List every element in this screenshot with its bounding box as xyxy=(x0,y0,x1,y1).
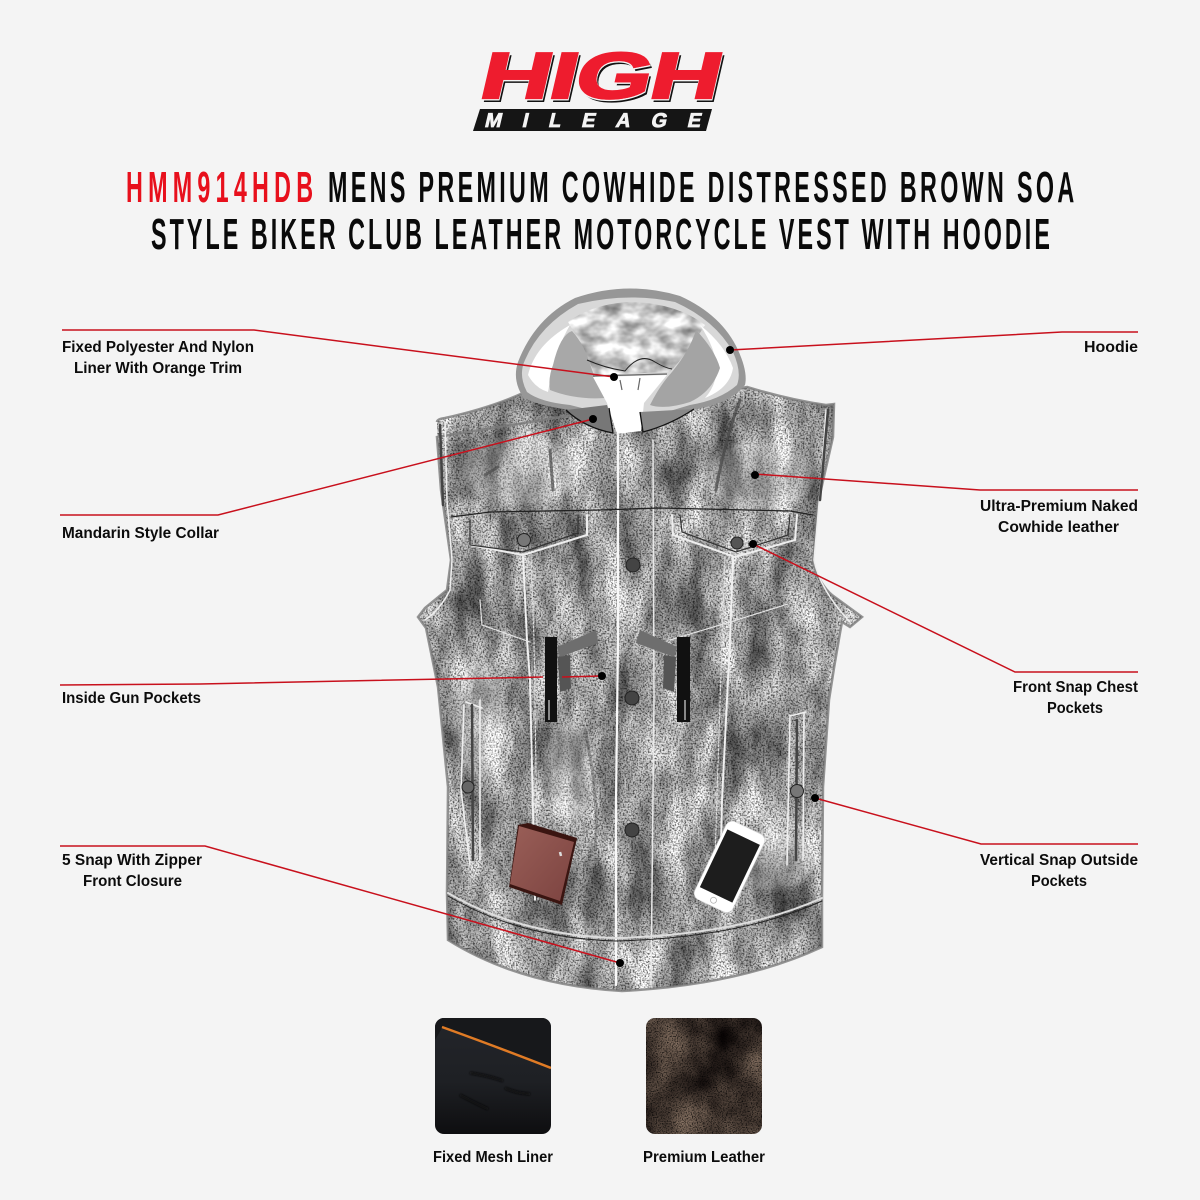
callout: Hoodie: Hoodie xyxy=(1084,339,1138,356)
callout: 5 Snap With Zipper Front Closure xyxy=(60,846,624,967)
logo: High Mileage: HIGH xyxy=(474,39,731,112)
callout: Front Snap Chest Pockets: Front Snap Chest xyxy=(1013,679,1138,696)
callout: 5 Snap With Zipper Front Closure: 5 Snap With Zipper xyxy=(62,852,202,869)
chest pockets xyxy=(470,515,587,555)
logo: High Mileage: HIGH xyxy=(476,42,733,115)
callout: Vertical Snap Outside Pockets: Pockets xyxy=(1031,873,1087,890)
icon: smartphone xyxy=(692,819,767,915)
callout: Fixed Polyester And Nylon Liner With Orange Trim: Liner With Orange Trim xyxy=(74,360,242,377)
callout: Vertical Snap Outside Pockets: Vertical Snap Outside xyxy=(980,852,1138,869)
callout: Mandarin Style Collar: Mandarin Style Collar xyxy=(62,525,219,542)
icon: left gun xyxy=(545,630,598,722)
vest edge shading xyxy=(418,387,862,991)
wrinkles xyxy=(550,450,553,490)
title: MENS PREMIUM COWHIDE DISTRESSED BROWN SOA xyxy=(328,163,1074,212)
vest body xyxy=(418,387,862,991)
callout: Front Snap Chest Pockets xyxy=(749,540,1138,717)
mandarin collar xyxy=(566,405,694,433)
callout: Ultra-Premium Naked Cowhide leather: Ultra-Premium Naked xyxy=(980,498,1138,515)
title: STYLE BIKER CLUB LEATHER MOTORCYCLE VEST WITH HOODIE xyxy=(151,210,1050,259)
callout: Fixed Polyester And Nylon Liner With Orange Trim: Fixed Polyester And Nylon xyxy=(62,339,254,356)
side pockets xyxy=(461,700,482,865)
swatch: Premium Leather xyxy=(643,1018,765,1166)
leather vest illustration xyxy=(418,288,862,991)
hoodie xyxy=(516,288,746,434)
callout: Fixed Polyester And Nylon Liner With Orange Trim xyxy=(62,330,618,381)
callout: Ultra-Premium Naked Cowhide leather xyxy=(751,471,1138,536)
callout: Ultra-Premium Naked Cowhide leather: Cowhide leather xyxy=(998,519,1119,536)
callout: Inside Gun Pockets xyxy=(60,672,606,707)
callout: Inside Gun Pockets: Inside Gun Pockets xyxy=(62,690,201,707)
callout: 5 Snap With Zipper Front Closure: Front Closure xyxy=(83,873,182,890)
swatch: Premium Leather: Premium Leather xyxy=(643,1149,765,1166)
swatch: Fixed Mesh Liner: Fixed Mesh Liner xyxy=(433,1149,553,1166)
callout: Front Snap Chest Pockets: Pockets xyxy=(1047,700,1103,717)
callout: Hoodie xyxy=(726,332,1138,356)
light wash over shoulders and body xyxy=(455,435,815,890)
callout: Vertical Snap Outside Pockets xyxy=(811,794,1138,890)
logo: High Mileage: MILEAGE xyxy=(483,110,704,132)
logo: High Mileage: HIGH xyxy=(474,40,731,113)
callout: Mandarin Style Collar xyxy=(60,415,597,542)
icon: wallet xyxy=(509,823,577,905)
title: HMM914HDB xyxy=(126,163,313,212)
swatch: Fixed Mesh Liner xyxy=(433,1018,553,1166)
title xyxy=(126,163,1074,259)
snaps xyxy=(462,534,804,837)
seams and stitching xyxy=(425,400,850,985)
icon: right gun xyxy=(636,630,690,722)
